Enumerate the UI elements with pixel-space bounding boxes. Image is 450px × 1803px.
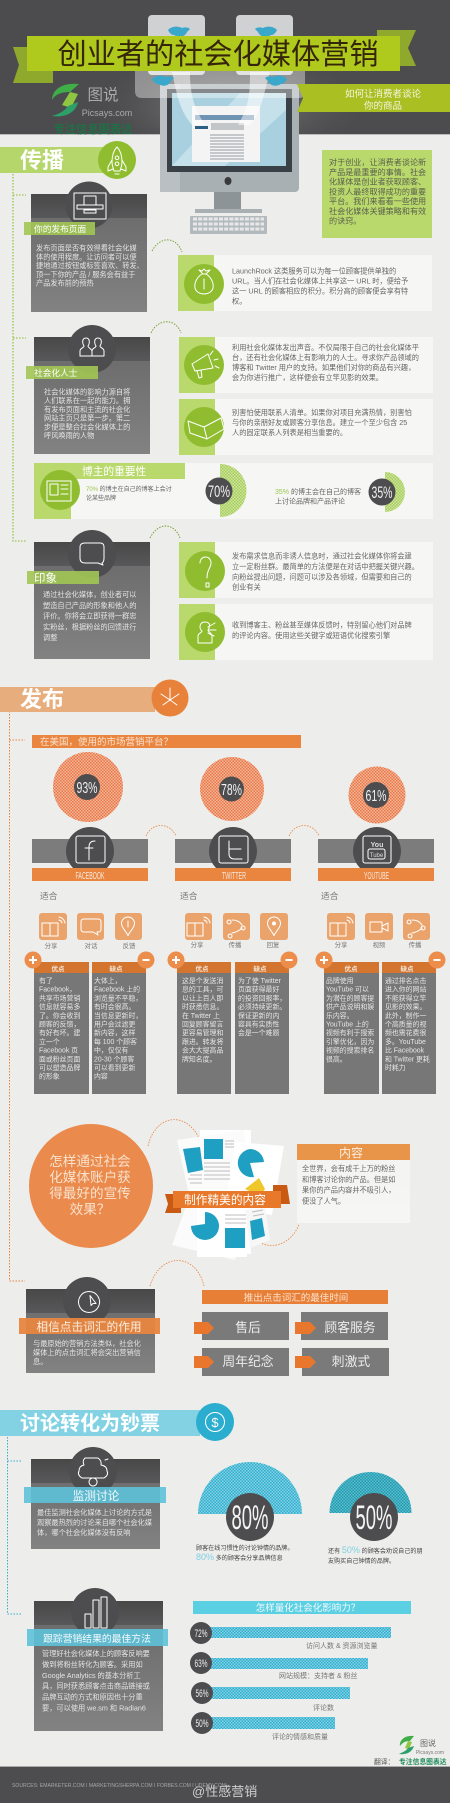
logo: translation credit: 图说 xyxy=(420,1738,436,1748)
bar: 56% xyxy=(191,1682,350,1712)
panel: Facebook 优点: 了。你会收到 xyxy=(39,1011,80,1020)
chart: 80%: 80% xyxy=(232,1499,268,1537)
panel text: 息。 xyxy=(33,1357,47,1366)
icon: person speaking xyxy=(198,622,216,643)
logo: translation credit: 翻译： xyxy=(374,1757,394,1766)
section heading: 传播: 传播 xyxy=(20,148,64,173)
panel text: 体的使用程度。让访问者可以便 xyxy=(36,252,137,261)
panel text: 有发布页面和主流的社会化 xyxy=(44,405,130,414)
panel: Facebook 优点: 顾客的反馈， xyxy=(39,1020,80,1028)
feature icons: Twitter: 回复 xyxy=(267,940,280,949)
panel text: 社会化媒体的影响力源自将 xyxy=(44,388,130,396)
logo: Picsays: 专注信息图表达 xyxy=(53,122,133,136)
panel: YouTube 优点: 很高。 xyxy=(326,1054,347,1063)
bar: 50% xyxy=(191,1712,335,1741)
section heading: 讨论转化为钞票: 讨论转化为钞票 xyxy=(20,1412,160,1435)
bar: 50%: 评论的情感和质量 xyxy=(272,1732,328,1741)
caption: 友购买自己钟情的品牌。 xyxy=(328,1557,395,1565)
panel: YouTube 优点: YouTube 上的 xyxy=(326,1020,369,1028)
panel: Twitter 优点: 跟进。转发将 xyxy=(182,1037,223,1046)
feature icons: Facebook: 对话 xyxy=(85,941,98,950)
panel: 内容: 内容 xyxy=(339,1145,363,1160)
intro text: 的诀窍。 xyxy=(329,216,361,226)
section heading: 发布: 发布 xyxy=(20,687,64,712)
footer xyxy=(0,1766,450,1803)
heading: 博主的重要性 xyxy=(82,465,146,478)
card: 粉丝群: 创业有关 xyxy=(232,583,261,592)
banner: 最佳时间 xyxy=(202,1290,388,1304)
panel: Facebook 缺点: 可以看到更新 xyxy=(94,1063,135,1072)
suitable label: 适合 xyxy=(180,890,198,901)
chart: 78% xyxy=(200,757,264,821)
panel: Facebook 缺点 xyxy=(92,952,154,1094)
panel: Facebook 缺点: 新内容，这样 xyxy=(94,1028,135,1037)
blue timeline xyxy=(8,1410,22,1614)
icon: bars xyxy=(85,1597,107,1628)
arrow arc xyxy=(152,240,182,252)
panel: YouTube 优点: 视频有利于搜索 xyxy=(326,1028,374,1037)
panel: Facebook 缺点: 每 100 个顾客 xyxy=(94,1037,137,1046)
panel text: 管理好社会化媒体上的顾客反响要 xyxy=(42,1649,150,1658)
panel: Twitter 缺点: 必须持续更新。 xyxy=(238,1002,286,1011)
panel: Facebook 缺点: 大体上， xyxy=(94,976,122,985)
suitable labels: 适合 xyxy=(40,890,58,901)
70% text: 70% xyxy=(86,487,99,493)
panel: 相信点击词汇的作用 xyxy=(19,1277,160,1373)
panel: Twitter 优点: 会大大提高品 xyxy=(182,1046,223,1055)
bar chart: influence metrics xyxy=(190,1622,391,1741)
card: 发出声音 xyxy=(179,337,433,393)
subtitle ribbon xyxy=(297,84,450,112)
chart: 50%: 50% xyxy=(356,1499,392,1537)
feature icons: YouTube: 分享 xyxy=(335,940,348,949)
chart: 35%: 35% xyxy=(372,483,392,502)
panel text: 媒体上的点击词汇将会突出营销信 xyxy=(33,1348,141,1357)
title: 创业者的社会化媒体营销 xyxy=(57,38,379,71)
callout: 怎样通过社会化媒体账户: 得最好的宣传 xyxy=(49,1185,131,1201)
intro text: 产品是最重要的事情。社会 xyxy=(329,167,426,177)
panel text: 顶一下你的产品 / 服务会有益于 xyxy=(36,270,135,279)
panel text: 人们联系在一起的能力。拥 xyxy=(44,396,130,405)
panel text: 品牌互动的方式和原因也十分重 xyxy=(42,1693,143,1702)
panel: 跟踪营销结果 xyxy=(27,1588,168,1731)
section heading: 讨论转化为钞票 xyxy=(0,1403,234,1441)
feature icons: Twitter xyxy=(185,913,288,949)
icon: open book xyxy=(188,418,224,439)
icon: question mark xyxy=(200,557,211,587)
card: 发出声音: 台，还有社会化媒体上有影响力的人士。寻求你产品领域的 xyxy=(232,353,419,362)
bar: 63%: 63% xyxy=(194,1658,208,1670)
panel: 相信点击词汇的作用: 相信点击词汇的作用 xyxy=(36,1320,142,1334)
panel: Twitter 优点: 牌知名度。 xyxy=(182,1054,216,1063)
platform: Twitter xyxy=(175,827,291,882)
chart: 50% xyxy=(328,1472,423,1565)
panel: YouTube 缺点: 进入你的网站 xyxy=(385,985,426,994)
panel: 印象 xyxy=(27,530,150,659)
platform: Facebook: FACEBOOK xyxy=(76,871,105,882)
platform: Twitter: TWITTER xyxy=(222,871,246,882)
panel text: 最佳监测社会化媒体上讨论的方式是 xyxy=(37,1508,152,1517)
icon: dollar xyxy=(206,1412,224,1432)
callout: 怎样通过社会化媒体账户 xyxy=(29,1124,153,1248)
card: 联系人清单: 人的固定联系人列表是相当重要的。 xyxy=(232,428,347,437)
panel: Facebook 优点: 立一个 xyxy=(39,1037,60,1046)
panel: YouTube 缺点: 此外，制作一 xyxy=(385,1011,426,1020)
panel: YouTube 优点: 乐内容。 xyxy=(326,1011,354,1020)
feature icons: YouTube xyxy=(327,913,430,949)
chart: 61% xyxy=(348,766,406,824)
panel: Facebook 优点: 可以塑造品牌 xyxy=(39,1063,80,1072)
chart: 35% xyxy=(368,472,405,512)
bar: 50%: 50% xyxy=(196,1718,209,1730)
70% text: 论某些品牌 xyxy=(86,494,116,502)
panel: Twitter 优点: 以让上百人即 xyxy=(182,993,223,1002)
panel: Facebook 优点: 有好有坏。建 xyxy=(39,1028,80,1037)
chart: 80% xyxy=(196,1462,302,1562)
arrow arcs between platforms xyxy=(146,826,319,836)
icon: twitter cards xyxy=(148,15,293,75)
panel: Facebook 缺点: Facebook 上的 xyxy=(94,985,140,994)
tile: 顾客服务 xyxy=(295,1312,388,1340)
panel: YouTube 缺点: 和 Twitter 更耗 xyxy=(385,1054,430,1063)
sources: SOURCES: EMARKETER.COM I MARKETINGSHERPA.COM I FORBES.COM I UDEMY.COM xyxy=(12,1783,226,1789)
panel: 印象: 印象 xyxy=(34,572,57,585)
panel text: 观察最热烈的讨论来自哪个社会化媒 xyxy=(37,1518,152,1527)
chart: 70% xyxy=(206,464,246,517)
banner: 市场营销平台: 在美国，使用的市场营销平台？ xyxy=(40,736,173,748)
logo: Picsays xyxy=(52,84,133,136)
card: 发出声音: 利用社会化媒体发出声音。不仅局限于自己的社会化媒体平 xyxy=(232,343,419,352)
panel text: 具，同时获悉顾客点击商品链接或 xyxy=(42,1682,150,1691)
card: 粉丝群: 向粉丝提出问题，问题可以涉及各领域，但需要和自己的 xyxy=(232,572,412,581)
section heading: 传播 xyxy=(0,141,136,179)
icon: YouTube xyxy=(363,836,391,863)
panel text: 要，可以使用 we.sm 和 Radian6 xyxy=(42,1704,146,1712)
icon: beehive xyxy=(78,1458,108,1486)
card: LaunchRock: 这一 URL 的顾客相应的积分。积分高的顾客便会享有特 xyxy=(232,286,408,296)
chart: 93% xyxy=(53,752,123,822)
icon: dollar: $ xyxy=(211,1415,219,1430)
caption: 顾客在线习惯性的讨论钟情的品牌。 xyxy=(196,1544,294,1552)
tile: 刺激式: 刺激式 xyxy=(332,1354,370,1369)
caption: 还有 xyxy=(328,1547,342,1555)
orange timeline xyxy=(10,687,25,1281)
ribbon text: 制作精美的内容 xyxy=(184,1193,266,1207)
panel: Facebook 缺点: 有时会很高。 xyxy=(94,1002,135,1011)
suitable label: 适合 xyxy=(321,890,339,901)
platform: YouTube: YOUTUBE xyxy=(364,871,389,882)
panel: Twitter 优点: 优点 xyxy=(196,964,209,973)
platform: YouTube xyxy=(318,827,434,882)
watermark: @性感营销 xyxy=(192,1784,257,1799)
panel: YouTube 缺点: 缺点 xyxy=(400,964,414,973)
logo: translation credit: Picsays.com xyxy=(416,1750,444,1756)
tile: 周年纪念: 周年纪念 xyxy=(222,1354,274,1369)
panel text: 做到将粉丝转化为顾客。采用如 xyxy=(42,1660,143,1669)
panel: YouTube 缺点 xyxy=(382,952,446,1094)
panel text: 便没了人气。 xyxy=(302,1196,345,1205)
card: LaunchRock: URL。当人们在社会化媒体上共享这一 URL 时，便给予 xyxy=(232,276,408,286)
panel: 监测讨论: 监测讨论 xyxy=(73,1489,120,1503)
intro text: 平台。我们来看看一些使用 xyxy=(329,196,426,206)
panel: Facebook 缺点: 20-30 个顾客 xyxy=(94,1054,134,1063)
caption: 80% xyxy=(196,1552,214,1562)
card: LaunchRock xyxy=(178,255,432,311)
card: 粉丝群: 发布需求信息而非诱人信息时，通过社会化媒体你将会建 xyxy=(232,552,412,560)
panel text: Google Analytics 的基本分析工 xyxy=(42,1671,141,1680)
panel: YouTube 缺点: 频也需花费很 xyxy=(385,1028,426,1037)
panel: YouTube 缺点: 见影的效果。 xyxy=(385,1002,426,1011)
bar: 56%: 评论数 xyxy=(313,1703,334,1712)
caption: 多的顾客会分享品牌信息 xyxy=(214,1554,283,1562)
card: 反馈 xyxy=(179,604,433,660)
panel: YouTube 缺点: 比 Facebook xyxy=(385,1046,425,1055)
panel: YouTube 缺点: 多。YouTube xyxy=(385,1037,426,1046)
card: 反馈: 的评论内容。使用这些关键字或短语优化搜索引擎 xyxy=(232,631,390,640)
bar: 72%: 72% xyxy=(194,1628,208,1640)
icon: layout xyxy=(47,481,71,501)
panel: Facebook 缺点: 内容 xyxy=(94,1072,108,1081)
panel: Facebook 优点: 面或粉丝页面 xyxy=(39,1054,80,1063)
panel: Facebook 优点: 信息就容易多 xyxy=(39,1002,80,1011)
panel: Twitter 缺点: 页面获得最好 xyxy=(238,985,279,994)
35% text: 35% xyxy=(275,489,289,496)
banner: 量化社会化影响力: 怎样量化社会化影响力？ xyxy=(256,1602,360,1614)
panel text: 调整 xyxy=(43,633,57,642)
platform: YouTube: Tube xyxy=(370,853,384,859)
arrow arc xyxy=(150,526,180,538)
subtitle text: 如何让消费者谈论 xyxy=(345,88,421,100)
panel: 你的发布页面 xyxy=(24,182,147,312)
panel: Twitter 缺点: 为了使 Twitter xyxy=(238,976,282,985)
icon: money bag xyxy=(195,269,213,294)
panel: 内容 xyxy=(297,1144,410,1223)
panel: YouTube 优点: 优点 xyxy=(344,964,358,973)
panel: Twitter 优点: 回复顾客留言 xyxy=(182,1020,223,1028)
panel: Twitter 缺点: 容具有实质性 xyxy=(238,1020,279,1028)
panel: Twitter 优点: 在 Twitter 上 xyxy=(182,1011,220,1020)
tile: 刺激式 xyxy=(295,1348,389,1376)
card: LaunchRock: LaunchRock 这类服务可以为每一位顾客提供单独的 xyxy=(232,266,396,276)
feature icons: Facebook: 反馈 xyxy=(123,941,136,950)
panel: YouTube 优点: YouTube 可以 xyxy=(326,986,369,994)
panel: Facebook 优点: Facebook 页 xyxy=(39,1047,78,1055)
intro text: 对于创业，让消费者谈论新 xyxy=(329,157,426,167)
panel text: 发布页面是否有效得看社会化媒 xyxy=(36,244,137,252)
icon: network xyxy=(161,688,179,705)
panel text: 步便是整合社会化媒体上的 xyxy=(44,422,130,431)
panel: Facebook 缺点: 缺点 xyxy=(110,964,123,973)
bar: 72%: 访问人数 & 资源浏览量 xyxy=(306,1641,378,1650)
feature icons: Twitter: 传播 xyxy=(229,940,242,949)
panel: Twitter 优点: 更容易管理和 xyxy=(182,1028,223,1037)
panel: YouTube 优点: 引擎优化，因为 xyxy=(326,1037,374,1046)
feature icons: Facebook: 分享 xyxy=(45,941,58,950)
banner: 市场营销平台 xyxy=(32,735,301,748)
panel text: 果你的产品内容并不吸引人， xyxy=(302,1186,395,1195)
bar: 56%: 56% xyxy=(196,1688,209,1700)
panel: YouTube 优点: 为潜在的顾客提 xyxy=(326,993,374,1002)
35% text: 的博主会在自己的博客 xyxy=(289,487,361,496)
feature icons: Facebook xyxy=(39,913,142,950)
panel: 社会化人士: 社会化人士 xyxy=(34,367,78,378)
feature icons: YouTube: 传播 xyxy=(409,940,422,949)
intro text: 社会化媒体关键策略和有效 xyxy=(329,206,426,216)
panel: YouTube 优点: 供产品说明和娱 xyxy=(326,1002,374,1011)
panel text: 网站主页只是第一步。第二 xyxy=(44,414,130,423)
panel: Twitter 优点: 时获悉信息。 xyxy=(182,1002,223,1011)
panel text: 呼风唤雨的人物 xyxy=(44,431,94,440)
card: 粉丝群: 立一定粉丝群。最简单的方法便是在对话中把握关键兴趣。 xyxy=(232,562,419,571)
panel: Facebook 缺点: 中，仅仅有 xyxy=(94,1046,129,1055)
green timeline xyxy=(13,147,27,541)
panel: 博主的重要性 xyxy=(34,463,433,519)
panel: YouTube 缺点: 个高质量的视 xyxy=(385,1020,426,1028)
platform: YouTube: You xyxy=(371,842,383,849)
callout: 怎样通过社会化媒体账户: 化媒体账户获 xyxy=(49,1169,131,1185)
panel: 你的发布页面: 你的发布页面 xyxy=(34,223,86,234)
panel: YouTube 优点 xyxy=(316,952,379,1094)
illustration: computer monitor xyxy=(135,70,305,234)
panel: Facebook 优点: 共享市场营销 xyxy=(39,993,80,1002)
tile: 周年纪念 xyxy=(194,1348,289,1376)
panel: Twitter 缺点: 缺点 xyxy=(254,964,267,973)
panel text: 通过社会化媒体，创业者可以 xyxy=(43,590,136,599)
panel: intro note xyxy=(322,150,432,238)
70% text: 的博主在自己的博客上会讨 xyxy=(98,485,172,493)
panel: 跟踪营销结果: 跟踪营销结果的最佳方法 xyxy=(43,1632,151,1645)
arrow arc xyxy=(151,322,181,333)
panel text: 评价。你将会立即获得一群忠 xyxy=(43,612,136,621)
icon: f xyxy=(76,836,105,863)
arrow arcs xyxy=(148,1120,299,1286)
bar: 63% xyxy=(190,1652,368,1680)
logo: Picsays: Picsays.com xyxy=(82,108,132,118)
panel: Twitter 优点: 这是个发送消 xyxy=(182,976,223,985)
platform: Facebook xyxy=(32,827,148,882)
card: 反馈: 收到博客主、粉丝甚至媒体反馈时，特别留心他们对品牌 xyxy=(232,620,412,630)
chart: 61%: 61% xyxy=(366,788,386,805)
section heading: 发布 xyxy=(0,680,188,716)
panel: Facebook 优点: 的形象 xyxy=(39,1072,60,1081)
feature icons: YouTube: 视频 xyxy=(373,940,386,949)
icon: megaphone xyxy=(192,351,219,378)
panel: Twitter 优点: 息的工具，可 xyxy=(182,985,223,994)
callout: 怎样通过社会化媒体账户: 效果？ xyxy=(70,1202,110,1217)
illustration: content documents xyxy=(165,1130,290,1260)
title ribbon xyxy=(13,30,416,83)
panel: 社会化人士 xyxy=(26,325,150,454)
panel: Facebook 优点: 有了 xyxy=(39,976,53,985)
tile: 售后: 售后 xyxy=(235,1320,261,1335)
caption: 50% 的顾客会劝说自己的朋 xyxy=(342,1545,423,1555)
tile: 售后 xyxy=(194,1312,289,1340)
panel: YouTube 缺点: 时耗力 xyxy=(385,1063,406,1072)
callout: 怎样通过社会化媒体账户: 怎样通过社会 xyxy=(49,1154,131,1169)
panel text: 塑造自己产品的形象和他人的 xyxy=(43,601,136,610)
panel: Facebook 缺点: 当信息更新时， xyxy=(94,1011,142,1020)
panel text: 全世界，会有成千上万的粉丝 xyxy=(302,1164,395,1173)
subtitle text: 你的商品 xyxy=(364,100,402,112)
panel: YouTube 优点: 品牌使用 xyxy=(326,976,354,985)
panel: 监测讨论 xyxy=(24,1447,166,1549)
icon: t xyxy=(219,836,248,863)
logo: translation credit: 专注信息图表达 xyxy=(399,1757,447,1766)
logo: Picsays: 图说 xyxy=(87,86,119,104)
intro text: 投资人最终取得成功的重要 xyxy=(329,186,426,196)
banner: 量化社会化影响力 xyxy=(193,1601,411,1614)
panel: Facebook 优点: Facebook， xyxy=(39,987,76,994)
tile: 顾客服务: 顾客服务 xyxy=(324,1320,376,1335)
bar: 63%: 网站规模：支持者 & 粉丝 xyxy=(279,1671,358,1680)
panel: YouTube 优点: 视频的搜索排名 xyxy=(326,1046,374,1055)
card: 联系人清单 xyxy=(179,399,433,455)
header background xyxy=(0,0,450,135)
card: 发出声音: 会为你进行推广，这样便会有立竿见影的效果。 xyxy=(232,373,383,382)
intro text: 化媒体是创业者获取顾客、 xyxy=(329,176,426,186)
panel: YouTube 缺点: 不能获得立竿 xyxy=(385,993,426,1002)
chart: 93%: 93% xyxy=(76,780,98,797)
panel text: 产品发布前的预热 xyxy=(36,279,94,288)
panel: Twitter 优点 xyxy=(168,952,231,1094)
panel text: 与最原始的营销方法类似，社会化 xyxy=(33,1339,141,1348)
card: LaunchRock: 权。 xyxy=(232,296,246,306)
bar: 72% xyxy=(190,1622,391,1650)
panel text: 实粉丝，根据粉丝的回馈进行 xyxy=(43,622,136,631)
banner: 最佳时间: 推出点击词汇的最佳时间 xyxy=(244,1292,348,1304)
panel: Twitter 缺点: 保证更新的内 xyxy=(238,1011,279,1020)
feature icons: Twitter: 分享 xyxy=(191,940,204,949)
panel: Facebook 优点: 优点 xyxy=(52,964,65,973)
icon: cursor xyxy=(79,1292,100,1312)
panel: Twitter 缺点: 会是一个难题 xyxy=(238,1028,279,1037)
panel: Twitter 缺点 xyxy=(235,952,298,1094)
panel text: 和博客讨论你的产品。但是如 xyxy=(302,1175,395,1184)
panel text: 体，哪个社会化媒体没有反响 xyxy=(37,1528,130,1537)
panel text: 捷地通过按钮或标签喜欢、转发、 xyxy=(36,261,144,270)
panel: Facebook 缺点: 浏览量不平稳， xyxy=(94,993,142,1002)
panel: Facebook 缺点: 用户会过滤更 xyxy=(94,1020,135,1028)
logo: translation credit xyxy=(374,1736,447,1766)
panel: Twitter 缺点: 的投资回报率， xyxy=(238,993,286,1002)
card: 联系人清单: 与你的亲朋好友或顾客分享信息。建立一个至少包含 25 xyxy=(232,418,407,427)
panel: Facebook 优点 xyxy=(24,952,89,1094)
card: 发出声音: 博客和 Twitter 用户的支持。如果他们对你的商品有兴趣， xyxy=(232,363,415,372)
35% text: 上讨论品牌和产品评论 xyxy=(275,496,345,506)
panel: YouTube 缺点: 通过排名点击 xyxy=(385,976,426,985)
chart: 70%: 70% xyxy=(208,482,230,501)
card: 联系人清单: 别害怕使用联系人清单。如果你对项目充满热情，别害怕 xyxy=(232,408,412,417)
card: 粉丝群 xyxy=(179,542,433,598)
icon: rocket xyxy=(108,147,126,174)
chart: 78%: 78% xyxy=(221,782,242,799)
